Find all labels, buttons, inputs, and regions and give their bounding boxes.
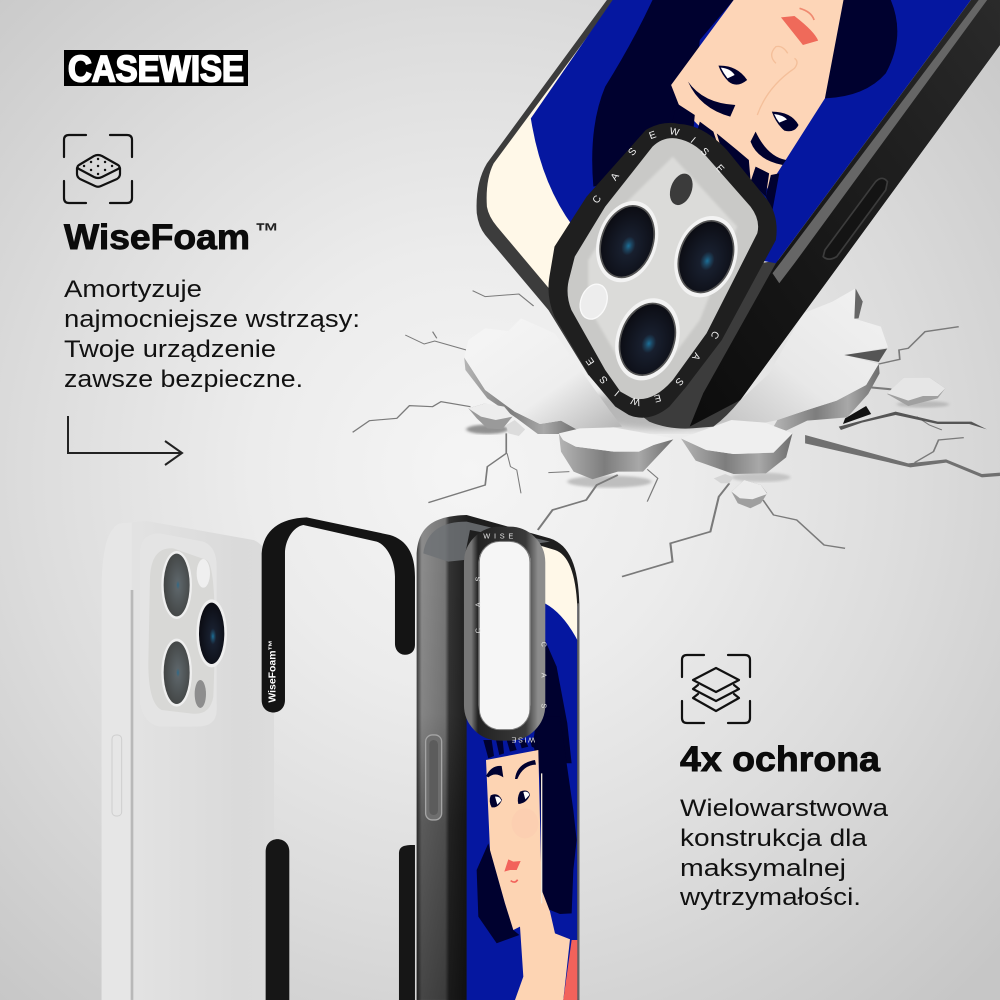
ring lettering: S	[598, 373, 611, 385]
phone: tilted case hitting the ground	[477, 0, 1000, 429]
frame	[417, 515, 579, 1000]
ring lettering: WISE	[483, 532, 513, 541]
ring lettering: A	[609, 171, 622, 183]
lenses	[161, 551, 192, 619]
ring lettering: E	[584, 355, 597, 367]
face	[671, 0, 843, 210]
text block: 4x ochrona description: Wielowarstwowa	[680, 795, 889, 822]
ring lettering: C	[591, 194, 604, 206]
button	[426, 735, 442, 820]
text block: 4x ochrona description: maksymalnej	[680, 855, 846, 882]
ring lettering: C	[708, 329, 721, 340]
text block: 4x ochrona description: konstrukcja dla	[680, 825, 868, 852]
text block: 4x ochrona description	[679, 795, 889, 911]
ring lettering: W	[629, 394, 642, 407]
side strip	[102, 523, 132, 1000]
phone: white iPhone	[102, 521, 274, 1000]
ring lettering: E	[713, 163, 726, 175]
ring lettering: E	[648, 129, 658, 142]
ring lettering: A	[689, 350, 702, 362]
right side band	[690, 0, 1000, 427]
icon: foam pad in viewfinder	[64, 135, 132, 203]
fringe	[673, 103, 779, 210]
bottom slab left	[559, 427, 673, 479]
strip label: WiseFoam™	[267, 640, 278, 703]
ring lettering: CAS	[474, 577, 483, 633]
ring lettering: S	[626, 146, 640, 158]
heading: 4x ochrona: 4x ochrona	[680, 740, 881, 779]
small rocks	[468, 377, 945, 508]
logo: CASEWISE: CASEWISE	[68, 48, 244, 90]
camera module	[548, 123, 777, 418]
nose	[757, 46, 797, 115]
bottom slab right	[681, 420, 792, 474]
text block: WiseFoam description: najmocniejsze wstrząsy:	[64, 306, 360, 333]
phone: case side view	[417, 515, 579, 1000]
ring lettering: I	[688, 136, 697, 146]
ring lettering: W	[668, 126, 681, 139]
eyes	[718, 66, 747, 85]
camera plate	[140, 533, 217, 727]
heading: WiseFoam: WiseFoam	[64, 218, 250, 257]
cream background of back print	[487, 0, 974, 295]
text block: 4x ochrona description: wytrzymałości.	[679, 884, 861, 911]
text block: WiseFoam description: zawsze bezpieczne.	[64, 366, 303, 393]
lips	[781, 16, 818, 45]
arrow	[68, 416, 182, 465]
ring lettering: S	[672, 375, 685, 387]
text block: WiseFoam description: Twoje urządzenie	[64, 336, 276, 363]
ring lettering: I	[613, 388, 622, 398]
camera ring on side-view case	[471, 532, 549, 744]
cracked ground	[353, 288, 1000, 577]
text block: WiseFoam description	[64, 276, 360, 393]
ring lettering: E	[652, 391, 662, 404]
illustration: woman's face on case	[477, 717, 577, 1000]
back print	[467, 543, 577, 1000]
right slab	[719, 288, 888, 431]
wedge crack, right	[805, 435, 1000, 477]
hair	[592, 0, 897, 187]
cracks	[353, 291, 964, 577]
lenses	[586, 193, 669, 290]
text block: WiseFoam description: Amortyzuje	[64, 276, 202, 303]
WiseFoam black foam strips	[262, 517, 415, 1000]
icon: stacked layers in viewfinder	[682, 655, 750, 723]
ring lettering	[474, 532, 549, 744]
ring lettering: S	[698, 146, 711, 159]
ring lettering: CAS	[540, 642, 549, 708]
trademark sign: ™	[255, 218, 279, 244]
brows	[688, 82, 735, 117]
blue back print	[531, 0, 971, 263]
ring lettering: WISE	[512, 735, 535, 744]
left slab	[464, 318, 622, 434]
case outer frame	[477, 0, 1000, 429]
ring lettering	[584, 126, 726, 407]
